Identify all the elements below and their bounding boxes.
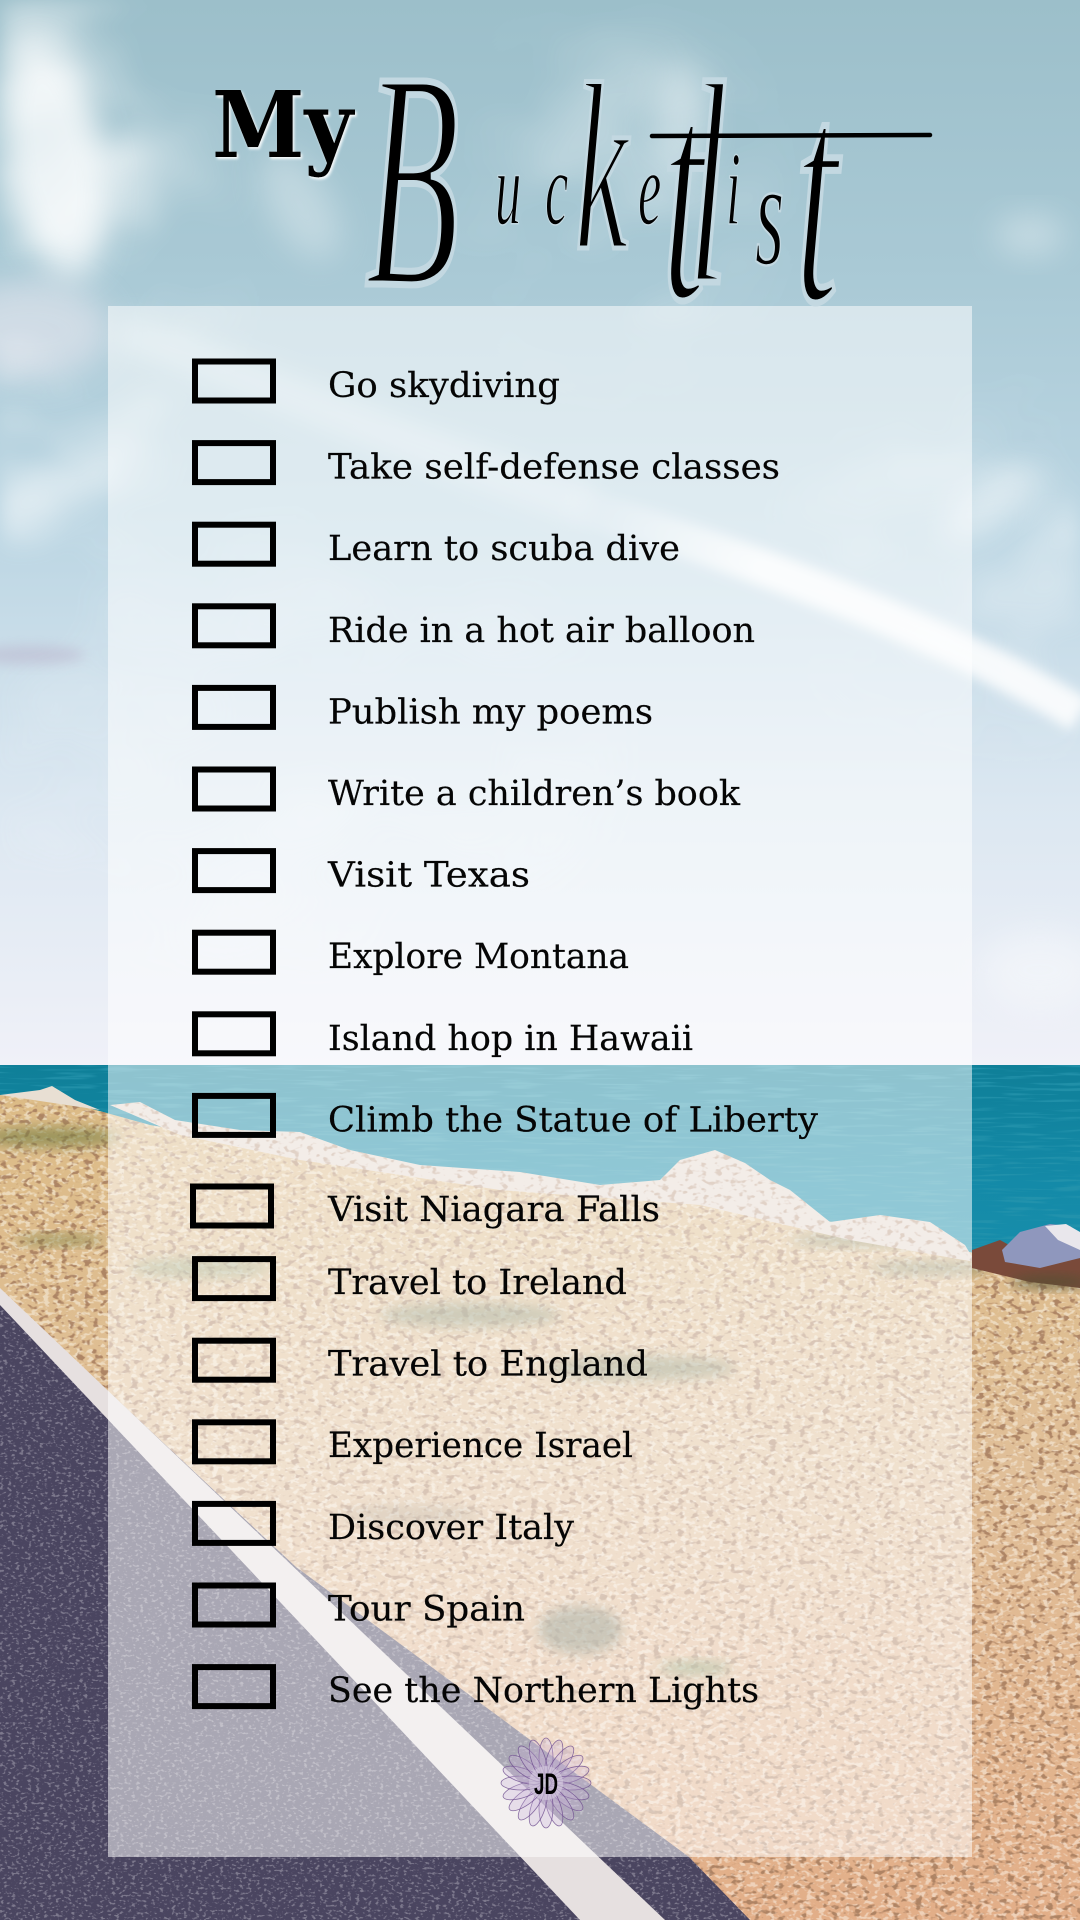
background: sea xyxy=(0,1065,1080,1305)
item: See the Northern Lights: See the Northern Lights xyxy=(328,1671,759,1711)
item: Ride in a hot air balloon: Ride in a hot air balloon xyxy=(328,611,755,651)
title: Bucketlist: i xyxy=(726,130,741,247)
item: Climb the Statue of Liberty xyxy=(195,1096,818,1140)
logo: JD flower badge: JD xyxy=(534,1768,558,1801)
title: My: My xyxy=(212,71,355,179)
item: Travel to England: Travel to England xyxy=(328,1345,648,1385)
item: Publish my poems xyxy=(195,688,653,732)
item: Experience Israel: Experience Israel xyxy=(328,1426,633,1466)
background: sky with clouds xyxy=(0,0,1080,1066)
title: Bucketlist: s xyxy=(755,130,784,297)
item: Tour Spain: Tour Spain xyxy=(328,1589,525,1629)
item: Explore Montana: Explore Montana xyxy=(328,937,629,977)
item: Explore Montana xyxy=(195,933,629,977)
item: Learn to scuba dive xyxy=(195,525,680,569)
background: beach sand xyxy=(0,1080,1080,1920)
item: Take self-defense classes xyxy=(195,443,780,488)
title: Bucketlist: t xyxy=(795,26,841,368)
title: Bucketlist: u xyxy=(495,130,521,247)
item: Ride in a hot air balloon xyxy=(195,606,755,651)
title: Bucketlist: t xyxy=(662,24,708,366)
item: Visit Texas: Visit Texas xyxy=(327,856,530,896)
background: rocks along shore xyxy=(0,1086,1080,1288)
item: Go skydiving xyxy=(195,362,560,406)
background: asphalt road xyxy=(0,1280,760,1920)
item: Climb the Statue of Liberty: Climb the Statue of Liberty xyxy=(328,1100,818,1140)
title: Bucketlist xyxy=(365,10,930,368)
item: Write a children's book: Write a children’s book xyxy=(328,774,741,814)
item: Visit Texas xyxy=(195,851,530,896)
item: Learn to scuba dive: Learn to scuba dive xyxy=(328,529,680,569)
item: Travel to England xyxy=(195,1341,648,1385)
title: Bucketlist: B xyxy=(365,10,460,352)
translucent list panel xyxy=(108,306,972,1857)
title: Bucketlist: l xyxy=(688,24,728,345)
title: Bucketlist: k xyxy=(575,35,630,301)
title: Bucketlist: e xyxy=(638,130,661,247)
item: Publish my poems: Publish my poems xyxy=(328,692,653,732)
item: Visit Niagara Falls: Visit Niagara Falls xyxy=(327,1190,660,1230)
item: Visit Niagara Falls xyxy=(193,1186,660,1230)
item: Island hop in Hawaii: Island hop in Hawaii xyxy=(328,1019,693,1059)
item: Write a children's book xyxy=(195,770,741,814)
item: Island hop in Hawaii xyxy=(195,1014,693,1059)
item: Travel to Ireland: Travel to Ireland xyxy=(328,1263,627,1303)
item: Discover Italy xyxy=(195,1504,574,1548)
item: See the Northern Lights xyxy=(195,1667,759,1711)
item: Go skydiving: Go skydiving xyxy=(328,366,560,406)
logo: JD flower badge xyxy=(501,1738,591,1828)
item: Tour Spain xyxy=(195,1586,525,1629)
item: Travel to Ireland xyxy=(195,1259,627,1303)
item: Take self-defense classes: Take self-defense classes xyxy=(328,448,780,488)
item: Experience Israel xyxy=(195,1422,633,1466)
item: Discover Italy: Discover Italy xyxy=(328,1508,574,1548)
title: Bucketlist: c xyxy=(545,130,568,247)
